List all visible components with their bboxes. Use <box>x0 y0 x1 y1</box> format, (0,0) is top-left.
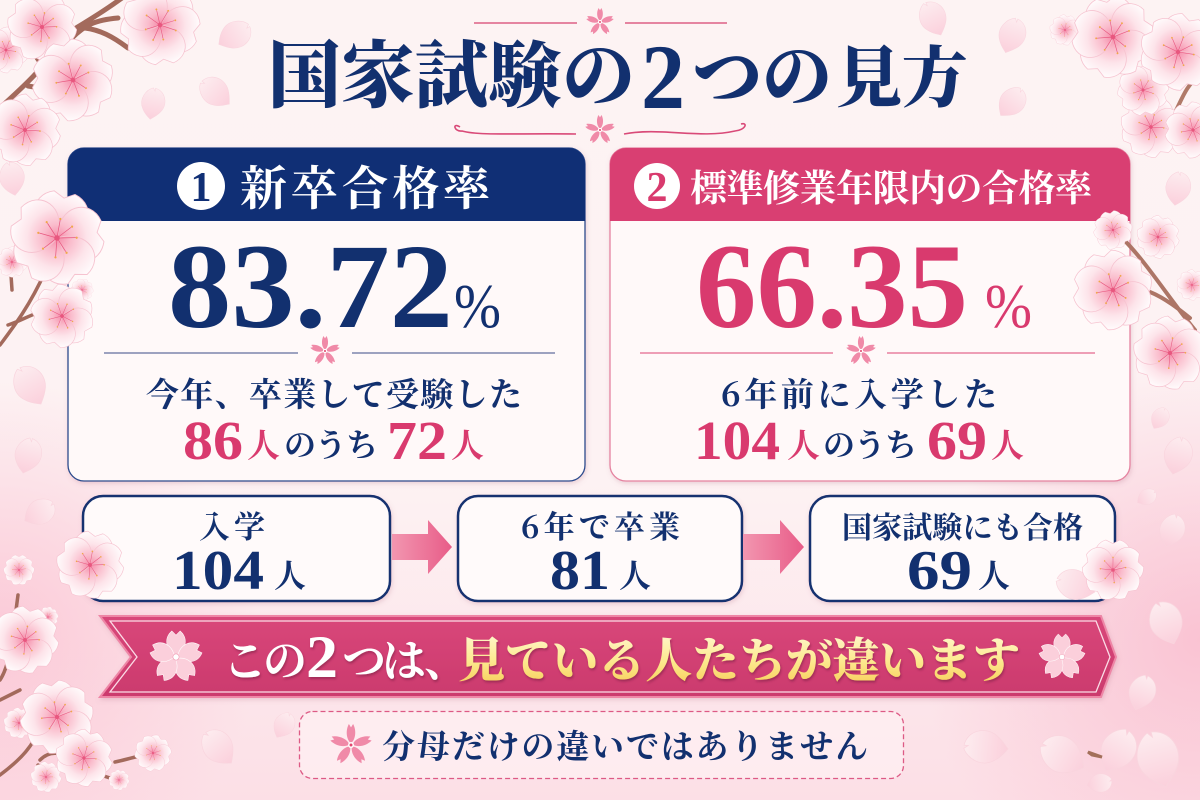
icon: flower left <box>148 631 204 683</box>
cherry branch: top left <box>0 0 218 179</box>
banner text white: この <box>223 625 307 689</box>
counts: 72 <box>387 410 447 471</box>
callout <box>300 712 904 778</box>
panel header <box>610 148 1130 221</box>
cherry branch: left middle <box>0 184 116 362</box>
flow step: 6年で卒業: 81 <box>550 540 610 602</box>
title: つの <box>692 21 832 122</box>
flow step: 国家試験にも合格: 国家試験にも合格 <box>842 503 1083 547</box>
cherry branch: bottom left <box>0 555 180 797</box>
cherry branch: upper right <box>1045 0 1200 169</box>
flow step: 入学: 104 <box>172 540 264 602</box>
counts: のうち <box>284 420 378 466</box>
counts: 86 <box>183 410 243 471</box>
counts: 人 <box>787 420 820 467</box>
description text: 今年、卒業して受験した <box>146 369 522 416</box>
counts: のうち <box>823 420 917 466</box>
title ornament: top <box>474 8 727 35</box>
callout text: 分母だけの違いではありません <box>382 721 868 768</box>
panel: 標準修業年限内の合格率 <box>610 148 1130 481</box>
title: 2 <box>641 26 685 128</box>
counts <box>694 410 1024 471</box>
big number: % <box>454 273 501 341</box>
banner text white: 2 <box>306 624 338 690</box>
title <box>268 17 968 128</box>
flower on step 1 <box>47 526 133 609</box>
divider <box>640 336 1095 365</box>
icon: flower right <box>1038 634 1086 680</box>
panel heading: 新卒合格率 <box>240 152 491 219</box>
big number: % <box>985 273 1032 341</box>
banner text white <box>223 624 468 690</box>
flow step: 6年で卒業 <box>458 496 742 602</box>
counts <box>183 410 484 471</box>
title: 見方 <box>836 25 968 120</box>
counts: 人 <box>991 420 1024 467</box>
panel heading: 標準修業年限内の合格率 <box>690 158 1093 212</box>
stem accent: bottom right <box>1088 752 1102 757</box>
panel: 新卒合格率 <box>68 148 585 481</box>
banner text white: つは <box>342 625 426 689</box>
cherry branch: right middle <box>1060 208 1200 401</box>
flow step: 6年で卒業: 人 <box>619 551 651 597</box>
icon: flower <box>330 724 372 764</box>
arrow: 6年で卒業 to 国家試験にも合格 <box>743 520 804 574</box>
divider <box>104 336 555 365</box>
ribbon banner <box>100 616 1116 697</box>
flow step: 国家試験にも合格 <box>810 496 1115 602</box>
counts: 人 <box>247 420 280 467</box>
panel header <box>68 148 585 221</box>
icon: number 1: 1 <box>190 165 212 211</box>
banner text white: 、 <box>424 625 468 689</box>
counts: 104 <box>694 410 780 471</box>
flow step: 6年で卒業: 6年で卒業 <box>521 502 680 547</box>
arrow: 入学 to 6年で卒業 <box>392 520 452 574</box>
flow step: 入学 <box>83 496 390 602</box>
flow step: 国家試験にも合格: 69 <box>907 540 972 602</box>
description text: 6年前に入学した <box>721 369 997 416</box>
icon: number 2 <box>634 163 680 211</box>
flow step: 入学: 人 <box>274 551 306 597</box>
flower on step 3 <box>1052 540 1147 606</box>
counts: 69 <box>927 410 987 471</box>
big number: 83.72 <box>168 220 453 354</box>
title ornament: bottom flourish <box>455 115 745 144</box>
counts: 人 <box>451 420 484 467</box>
big number: 66.35 <box>696 220 968 354</box>
title: 国家試験の <box>268 17 635 122</box>
flow step: 国家試験にも合格: 人 <box>978 551 1010 597</box>
icon: number 2: 2 <box>646 165 668 211</box>
flow step: 入学: 入学 <box>199 502 265 547</box>
banner text gold: 見ている人たちが違います <box>458 624 1020 691</box>
icon: number 1 <box>177 162 225 211</box>
